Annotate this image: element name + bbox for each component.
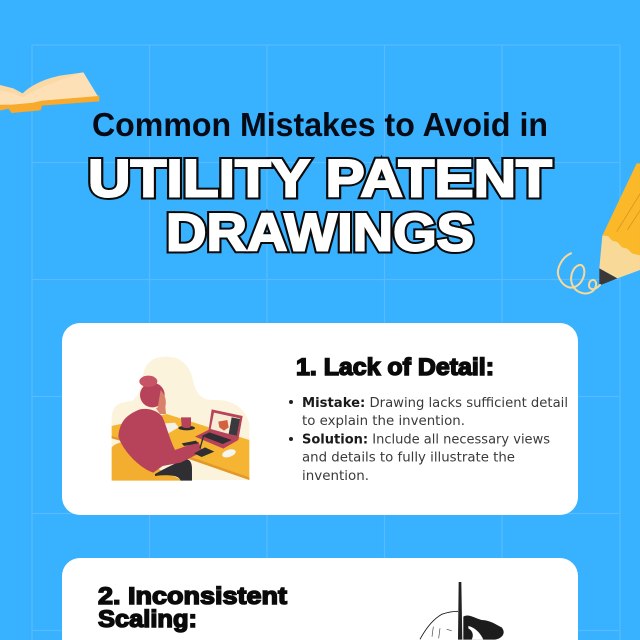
bullet: mistake: Mistake: Drawing lacks sufficient detail — [302, 396, 568, 411]
heading: lack of detail: 1. Lack of Detail: — [296, 354, 494, 381]
title line 2: DRAWINGS — [166, 204, 474, 262]
heading: inconsistent scaling — [98, 583, 287, 633]
title line 1: UTILITY PATENT — [88, 150, 552, 208]
bullet: solution: Solution: Include all necessary views — [302, 432, 550, 448]
illustration: hand holding pen — [420, 582, 504, 640]
bullet: solution — [289, 432, 550, 484]
bullet: solution: invention. — [302, 469, 369, 484]
icon: pencil with squiggle — [558, 163, 640, 293]
subtitle: Common Mistakes to Avoid in — [92, 106, 548, 143]
illustration: designer at laptop — [112, 357, 249, 481]
title line 2: DRAWINGS — [166, 204, 474, 262]
bullet: solution: and details to fully illustrate the — [302, 450, 515, 466]
panel: 1. lack of detail — [62, 323, 578, 515]
icon: open book — [0, 72, 99, 113]
bullet: mistake: to explain the invention. — [302, 414, 465, 429]
panel: 2. inconsistent scaling — [62, 558, 578, 640]
heading: inconsistent scaling: Scaling: — [98, 606, 197, 633]
title line 1: UTILITY PATENT — [88, 150, 552, 208]
heading: inconsistent scaling: 2. Inconsistent — [98, 583, 287, 610]
bullet: mistake — [289, 396, 568, 429]
